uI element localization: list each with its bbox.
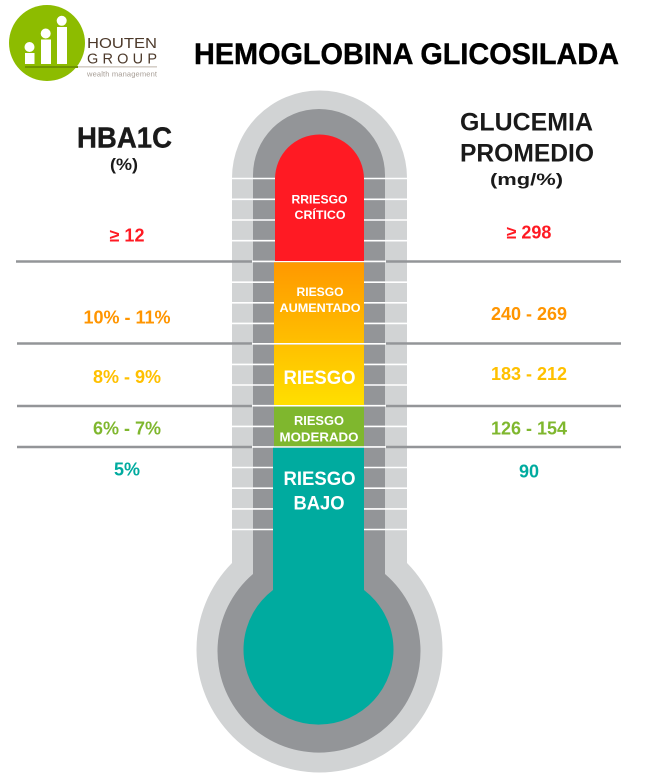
label: rriesgo crítico — [292, 194, 348, 222]
left values: 8% - 9% — [93, 367, 161, 387]
thermometer outer shell — [196, 91, 443, 772]
logo baseline on circle — [25, 66, 78, 68]
right column heading: (mg/%) — [490, 170, 563, 189]
left column heading: HBA1C — [77, 122, 172, 154]
left column heading — [77, 122, 172, 174]
left values: 6% - 7% — [93, 418, 161, 438]
right values — [491, 222, 567, 482]
label: riesgo: RIESGO — [284, 367, 356, 389]
left column heading: (%) — [110, 155, 138, 174]
label: riesgo moderado: MODERADO — [280, 430, 359, 444]
left values: 5% — [114, 460, 140, 480]
label: riesgo moderado: RIESGO — [294, 414, 344, 428]
right values: 90 — [519, 462, 539, 482]
segment: riesgo bajo with bulb — [244, 448, 394, 725]
tick marks — [232, 178, 407, 530]
right column heading — [460, 109, 594, 189]
left values: ≥ 12 — [110, 226, 144, 246]
logo wordmark second line: GROUP — [87, 52, 157, 68]
logo wordmark: HOUTEN — [87, 36, 157, 52]
thermometer middle shell — [217, 109, 420, 753]
right column heading: PROMEDIO — [460, 140, 594, 168]
label: rriesgo crítico: RRIESGO — [292, 194, 348, 206]
label: riesgo bajo: BAJO — [294, 492, 344, 514]
logo baseline — [78, 66, 157, 68]
label: riesgo bajo: RIESGO — [284, 468, 356, 490]
left values — [83, 226, 171, 480]
divider lines — [16, 262, 621, 447]
segment: riesgo — [274, 345, 364, 405]
logo bars icon — [24, 16, 67, 64]
label: riesgo aumentado: AUMENTADO — [280, 301, 360, 315]
thermometer — [196, 91, 443, 772]
right values: 126 - 154 — [491, 418, 567, 438]
right column heading: GLUCEMIA — [460, 109, 593, 137]
label: riesgo bajo — [284, 468, 356, 514]
title: HEMOGLOBINA GLICOSILADA — [194, 38, 619, 71]
logo: Houten Group — [9, 5, 158, 81]
label: riesgo aumentado: RIESGO — [296, 285, 344, 299]
label: riesgo moderado — [280, 414, 359, 444]
right values: 240 - 269 — [491, 304, 567, 324]
segment: riesgo moderado — [274, 406, 364, 446]
right values: ≥ 298 — [507, 222, 551, 242]
label: riesgo aumentado — [280, 285, 360, 315]
left values: 10% - 11% — [83, 307, 171, 327]
segment: riesgo crítico — [275, 134, 364, 261]
logo tagline: wealth management — [86, 70, 158, 78]
logo green circle — [9, 5, 85, 81]
label: rriesgo crítico: CRÍTICO — [294, 209, 346, 222]
right values: 183 - 212 — [491, 364, 567, 384]
segment: riesgo aumentado — [274, 262, 364, 343]
